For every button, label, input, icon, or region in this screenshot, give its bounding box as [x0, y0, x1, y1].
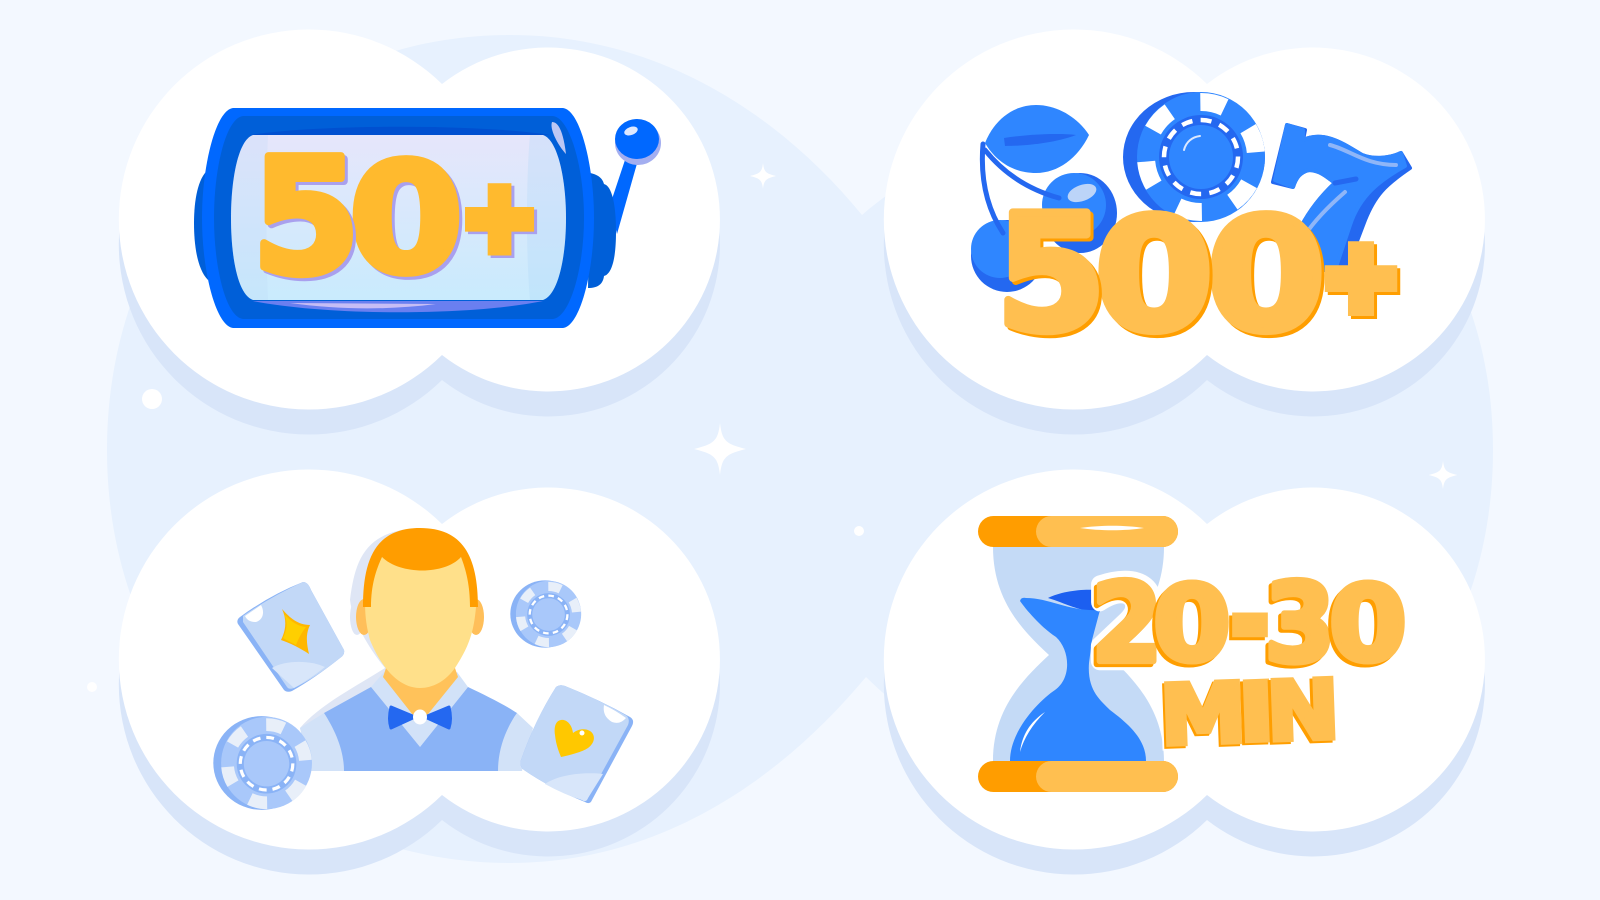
- label: 500+: 5: [996, 181, 1106, 367]
- label: 50+: +: [465, 166, 540, 273]
- label: 500+: 0: [1207, 187, 1325, 366]
- label: MIN: N: [1262, 665, 1339, 763]
- lever: [610, 119, 661, 234]
- icon: lucky seven: [1273, 125, 1410, 270]
- label: 500+: 0: [1095, 187, 1213, 366]
- label: 20-30: 2: [1092, 560, 1162, 687]
- panel: live dealer: [119, 470, 720, 874]
- icon: slot machine: [194, 108, 661, 328]
- icon: cherries: [971, 105, 1117, 292]
- label: 500+: 0: [1210, 190, 1328, 369]
- panel: games 500+: [884, 29, 1485, 434]
- label: 20-30: 2: [1089, 563, 1159, 690]
- decorative sparkles and dots: [87, 163, 1457, 692]
- label: 500+: 0: [1098, 190, 1216, 369]
- label: 20-30: 0: [1150, 568, 1228, 688]
- label: 500+: +: [1326, 224, 1402, 333]
- label: 500+: [996, 181, 1402, 370]
- icon: heart card: [520, 685, 633, 803]
- label: MIN: N: [1265, 663, 1342, 761]
- label: MIN: M: [1159, 665, 1248, 764]
- label: 50+: 0: [352, 135, 466, 310]
- label: 50+: 5: [255, 128, 363, 313]
- label: 20-30: 0: [1153, 565, 1231, 685]
- label: 50+: +: [462, 164, 537, 271]
- label: 20-30: 2: [1092, 560, 1162, 687]
- label: MIN: I: [1232, 666, 1276, 763]
- label: 20-30: 3: [1265, 560, 1335, 687]
- label: MIN: M: [1159, 665, 1248, 764]
- label: 50+: [252, 125, 540, 313]
- icon: hourglass: [978, 516, 1178, 792]
- icon: large chip: [213, 710, 320, 817]
- label: 500+: 5: [999, 184, 1109, 370]
- icon: dealer: [300, 528, 533, 771]
- icon: small chip: [510, 576, 587, 653]
- label: 20-30: -: [1229, 544, 1271, 693]
- label: 20-30: 0: [1326, 568, 1404, 688]
- icon: poker chip: [1123, 82, 1276, 232]
- label: 20-30: [1089, 544, 1407, 696]
- bow tie: [390, 707, 450, 728]
- label: MIN: [1157, 662, 1342, 766]
- label: MIN: I: [1235, 664, 1279, 761]
- panel: slot machine 50+: [119, 29, 720, 434]
- label: 500+: +: [1323, 221, 1399, 330]
- label: 50+: 5: [252, 125, 360, 310]
- icon: diamond card: [237, 582, 344, 692]
- label: MIN: M: [1157, 667, 1246, 766]
- label: 20-30: 3: [1262, 563, 1332, 690]
- label: 20-30: 0: [1153, 565, 1231, 685]
- label: 50+: 0: [349, 132, 463, 307]
- background blob: [107, 35, 1493, 863]
- label: 20-30: 0: [1329, 565, 1407, 685]
- label: 20-30: -: [1226, 547, 1268, 696]
- panel: time 20-30 min: [884, 470, 1485, 874]
